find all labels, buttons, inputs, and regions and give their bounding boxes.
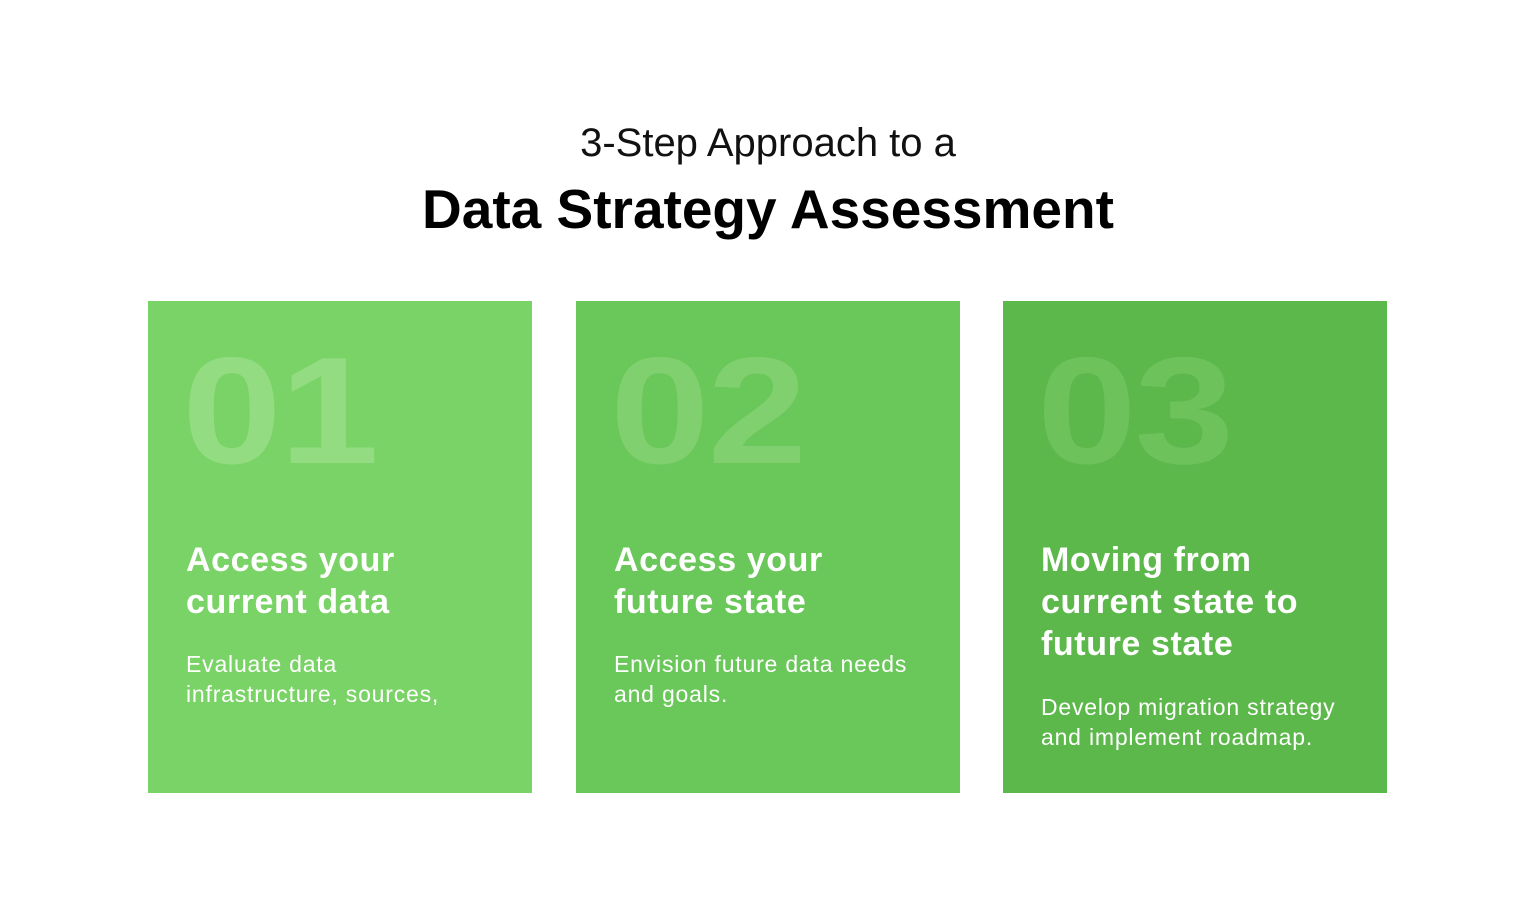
heading step 2 [614, 541, 823, 621]
panel: step 3 [1003, 301, 1387, 793]
text step 2: Envision future data needs [614, 651, 907, 677]
heading step 2: future state [614, 583, 806, 621]
heading step 1: current data [186, 583, 390, 621]
panel: step 2 [576, 301, 960, 793]
text step 1: Evaluate data [186, 651, 337, 677]
text step 3: Develop migration strategy [1041, 694, 1335, 720]
heading step 3: future state [1041, 625, 1233, 663]
number 03: 03 [1037, 326, 1232, 496]
heading step 2: Access your [614, 541, 823, 579]
title: main heading: Data Strategy Assessment [422, 178, 1114, 240]
text step 1: infrastructure, sources, [186, 681, 439, 707]
title: subtitle line: 3-Step Approach to a [580, 121, 956, 165]
text step 1 [186, 651, 439, 707]
text step 3: and implement roadmap. [1041, 724, 1313, 750]
number 02: 02 [610, 326, 805, 496]
heading step 3 [1041, 541, 1298, 663]
text step 2: and goals. [614, 681, 728, 707]
number 01: 01 [182, 326, 377, 496]
heading step 3: Moving from [1041, 541, 1252, 579]
text step 3 [1041, 694, 1335, 750]
panel: step 1 [148, 301, 532, 793]
text step 2 [614, 651, 907, 707]
heading step 1: Access your [186, 541, 395, 579]
heading step 3: current state to [1041, 583, 1298, 621]
heading step 1 [186, 541, 395, 621]
